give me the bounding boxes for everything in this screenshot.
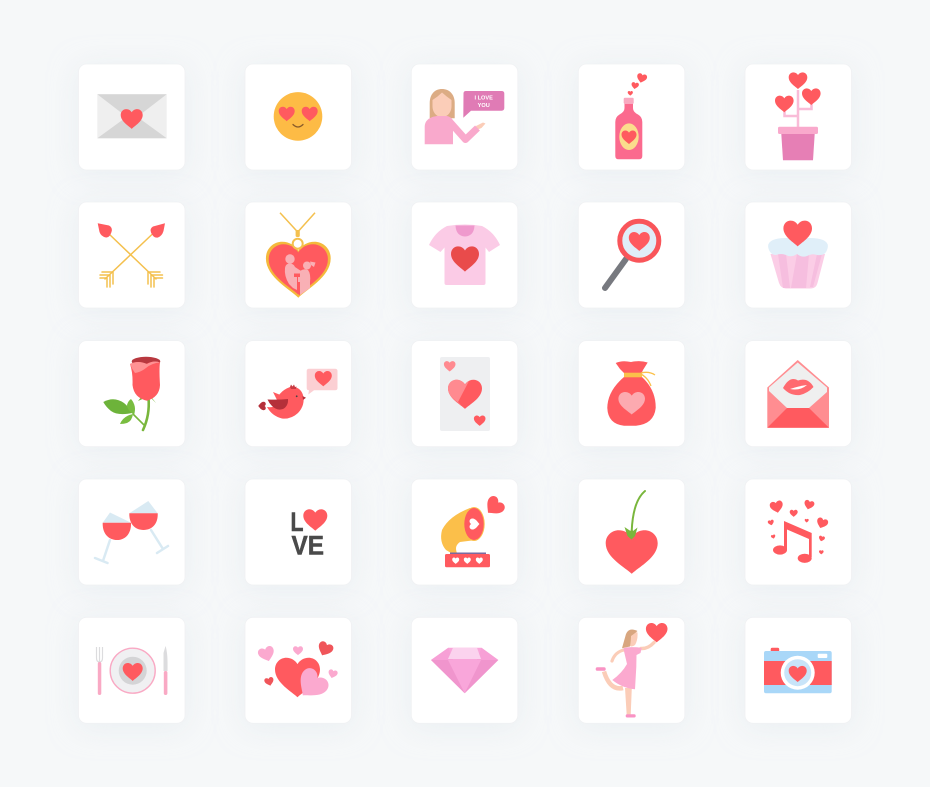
panel: place setting card	[78, 617, 185, 723]
panel: music card	[745, 479, 852, 585]
icon: LOVE lettering with heart	[290, 507, 327, 560]
icon: rose	[103, 357, 160, 430]
icon: heart sack	[607, 361, 656, 426]
panel: bottle card	[578, 64, 685, 170]
panel: envelope card	[78, 64, 185, 170]
icon: LOVE lettering with heart: L	[290, 507, 304, 537]
icon: crossed arrows	[98, 223, 165, 287]
panel: girl with heart card	[578, 617, 685, 723]
panel: heart plant card	[745, 64, 852, 170]
icon: bottle with hearts	[615, 73, 648, 159]
panel: money bag card	[578, 341, 685, 447]
icon: potted heart plant	[775, 72, 821, 160]
panel: diamond card	[411, 617, 518, 723]
icon: woman with speech bubble: YOU	[478, 103, 490, 109]
icon: music note with hearts	[767, 499, 829, 563]
panel: hearts card	[245, 617, 352, 723]
icon: cluster of hearts	[257, 640, 338, 705]
icon: sealed envelope with heart	[97, 94, 167, 138]
icon: pink diamond	[431, 648, 498, 693]
panel: locket card	[245, 202, 352, 308]
panel: emoji card	[245, 64, 352, 170]
panel: magnifier card	[578, 202, 685, 308]
icon: bird with speech bubble	[258, 369, 338, 419]
icon: girl holding heart	[596, 623, 668, 718]
icon: hearts playing card	[440, 357, 490, 431]
icon: magnifying glass with heart	[605, 221, 659, 288]
panel: wine glasses card	[78, 479, 185, 585]
panel: bird card	[245, 341, 352, 447]
panel: cherry heart card	[578, 479, 685, 585]
panel: crossed arrows card	[78, 202, 185, 308]
icon: heart cherry with stem	[606, 491, 658, 574]
icon: clinking wine glasses	[95, 501, 168, 563]
icon: open envelope with lips	[767, 360, 829, 428]
panel: camera card	[745, 617, 852, 723]
icon: woman with speech bubble	[425, 89, 504, 144]
panel: t-shirt card	[411, 202, 518, 308]
icon: camera with heart	[764, 648, 832, 693]
panel: I love you card	[411, 64, 518, 170]
panel: cupcake card	[745, 202, 852, 308]
panel: rose card	[78, 341, 185, 447]
panel: open envelope card	[745, 341, 852, 447]
panel: playing card	[411, 341, 518, 447]
icon: gramophone with heart	[441, 494, 507, 567]
panel: gramophone card	[411, 479, 518, 585]
icon: heart eyes emoji	[274, 92, 322, 141]
icon: cupcake with heart	[768, 221, 828, 288]
icon: plate with fork and knife	[96, 646, 168, 695]
panel: LOVE card	[245, 479, 352, 585]
icon: t-shirt with heart	[429, 224, 500, 285]
icon: LOVE lettering with heart: VE	[292, 530, 324, 560]
icon: woman with speech bubble: I LOVE	[475, 96, 493, 102]
icon: heart locket necklace	[266, 213, 331, 298]
